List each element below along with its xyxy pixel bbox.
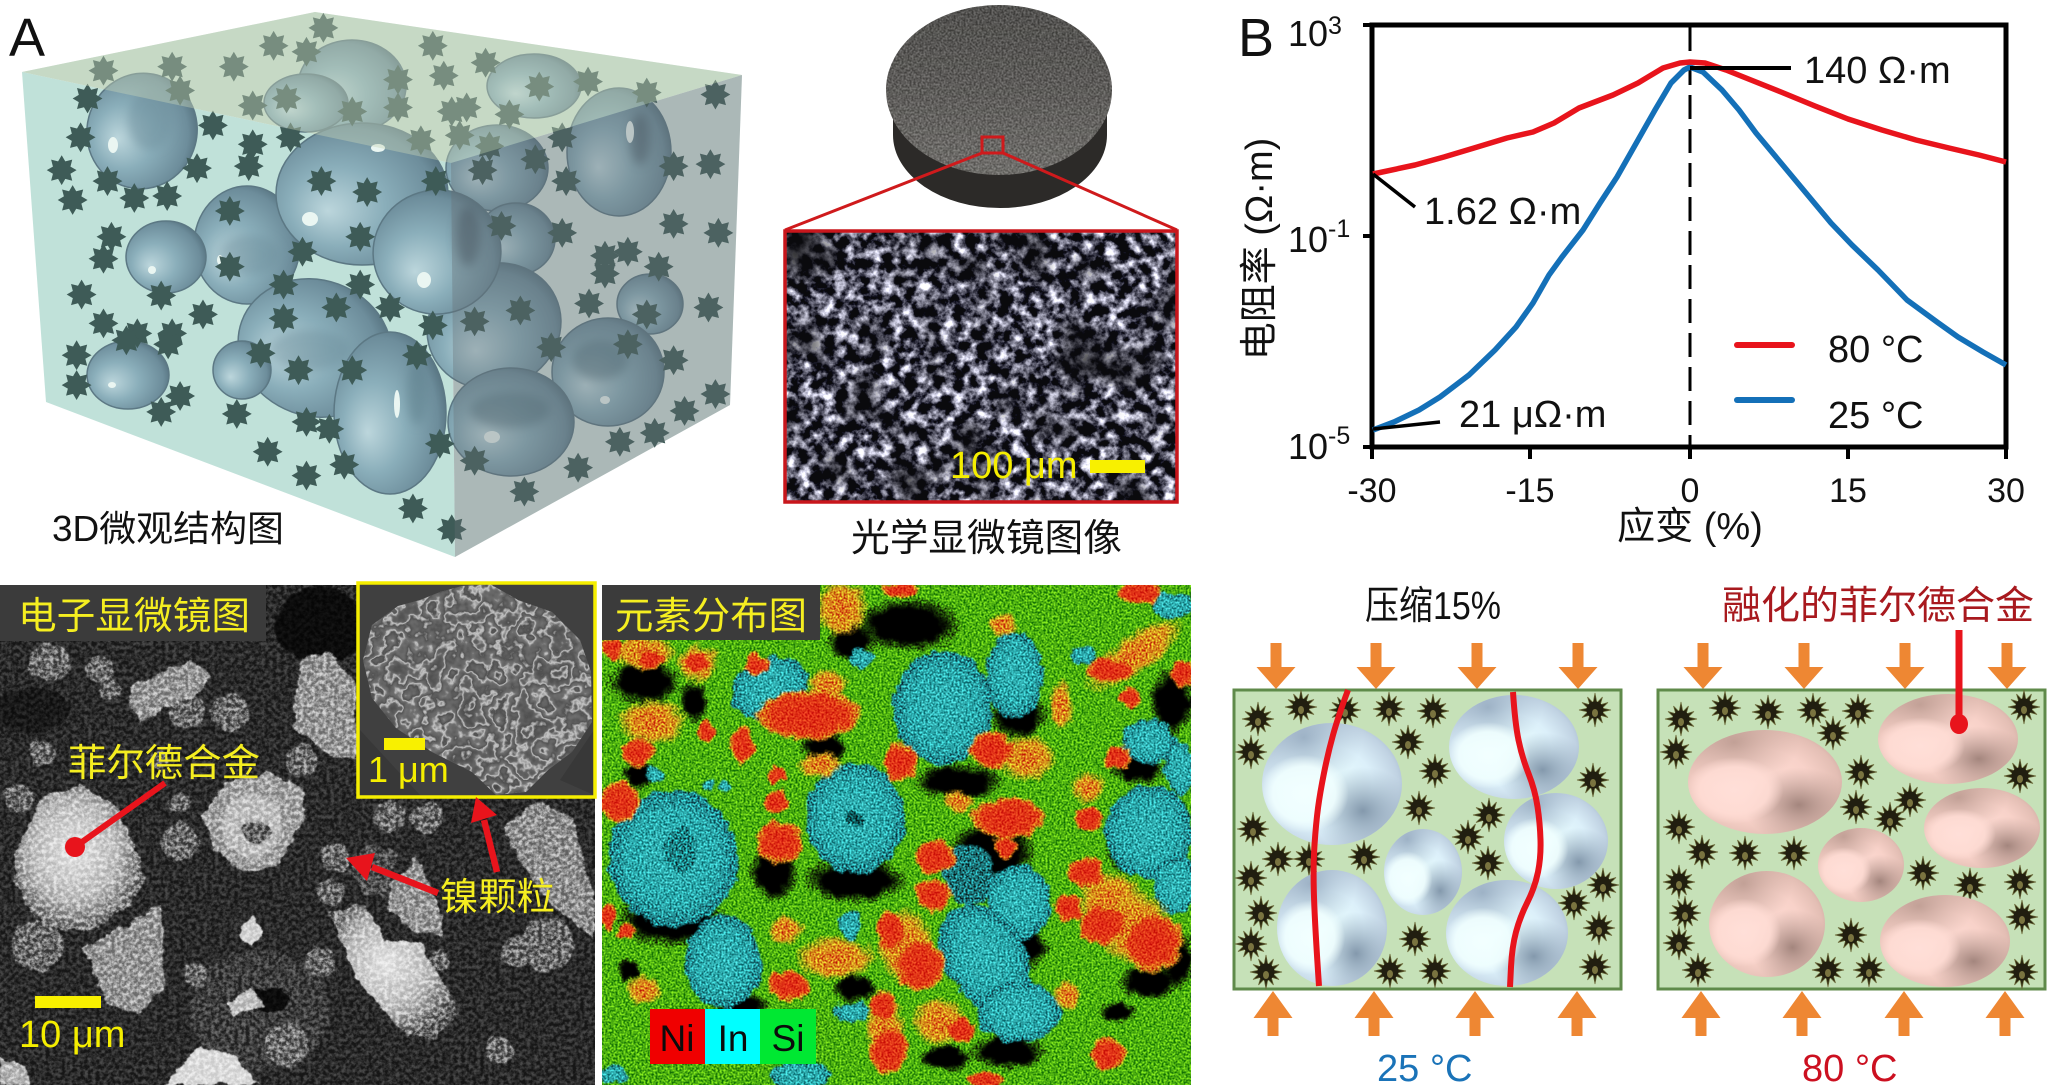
dark shadows <box>606 597 1196 1072</box>
element legend: Ni <box>660 1018 694 1059</box>
solid alloy spheres <box>1262 695 1608 986</box>
cube top face <box>22 12 742 163</box>
y tick labels: -1 <box>1328 215 1350 243</box>
element distribution map <box>598 578 1199 1086</box>
y tick labels: 10 <box>1288 426 1328 467</box>
matrix panel <box>1658 690 2045 989</box>
particles <box>0 587 593 1085</box>
map blobs <box>598 578 1199 1086</box>
element map label box: 元素分布图 <box>615 596 807 638</box>
micrograph border <box>785 231 1177 502</box>
x tick labels: -30 <box>1347 472 1397 510</box>
inset border <box>358 583 595 797</box>
callout line to molten alloy <box>1950 630 1968 734</box>
translucent top-face shading <box>22 12 742 163</box>
callout 140: 140 Ω·m <box>1804 50 1951 92</box>
schematic 80 C <box>1658 690 2045 989</box>
disc side <box>893 110 1107 208</box>
axes frame <box>1372 25 2006 447</box>
inset background <box>358 582 595 797</box>
panel label B: B <box>1238 8 1274 68</box>
annotation: nickel particles <box>346 797 555 919</box>
3D microstructure cube <box>22 12 742 557</box>
legend: 80 °C <box>1828 329 1923 371</box>
electron micrograph <box>0 585 595 1085</box>
heading: compress 15%: 压缩15% <box>1365 585 1501 628</box>
SEM label box <box>0 585 266 641</box>
curve 25 C <box>1373 67 2006 430</box>
cube left face <box>22 72 455 557</box>
element map label box <box>602 585 820 640</box>
annotation: Field's alloy: 菲尔德合金 <box>68 743 260 785</box>
inset scale text: 1 μm <box>368 749 449 790</box>
legend <box>1737 329 1923 437</box>
top arrows right panel <box>1684 643 2026 689</box>
y axis title: 电阻率 (Ω·m) <box>1239 138 1281 360</box>
panel label A: A <box>9 8 45 68</box>
disc top surface <box>886 5 1112 175</box>
y tick labels: 10 <box>1288 13 1328 54</box>
dark background <box>0 585 595 1085</box>
SEM label box: 电子显微镜图 <box>18 596 250 638</box>
scale bar <box>1090 460 1145 473</box>
caption: 3D microstructure: 3D微观结构图 <box>52 508 284 549</box>
curve 80 C <box>1373 62 2006 174</box>
SEM scale bar: 10 μm <box>19 1014 125 1056</box>
flower particle <box>358 582 595 797</box>
y tick labels: -5 <box>1328 422 1350 450</box>
x tick labels: -15 <box>1505 472 1555 510</box>
surface texture <box>0 585 595 1085</box>
y tick labels <box>1288 12 1350 467</box>
resistivity chart <box>1239 12 2025 548</box>
ticks <box>1363 25 2006 459</box>
translucent right-face shading <box>451 75 742 557</box>
alloy bubbles <box>74 40 683 494</box>
x axis title: 应变 (%) <box>1617 506 1763 548</box>
x tick labels: 0 <box>1681 472 1699 510</box>
caption: optical microscope: 光学显微镜图像 <box>851 518 1122 560</box>
optical micrograph <box>785 231 1177 502</box>
teal alloy blobs <box>598 592 1199 1086</box>
micrograph texture <box>785 231 1177 502</box>
x tick labels <box>1347 472 2025 510</box>
element legend: Si <box>772 1018 804 1059</box>
x tick labels: 30 <box>1987 472 2025 510</box>
callout 1.62: 1.62 Ω·m <box>1424 191 1581 233</box>
matrix panel <box>1234 690 1621 989</box>
callout 21 <box>1373 394 1606 436</box>
top arrows left panel <box>1256 643 1598 689</box>
cube right face <box>451 75 742 557</box>
bottom arrows left panel <box>1254 991 1596 1036</box>
molten alloy spheres <box>1688 694 2040 987</box>
bottom arrows right panel <box>1682 991 2024 1036</box>
green matrix <box>602 585 1191 1085</box>
nickel red blobs <box>598 581 1194 1086</box>
nickel stars in cube <box>47 13 733 544</box>
element legend: In <box>718 1018 748 1059</box>
y tick labels: 3 <box>1328 12 1342 40</box>
callout 1.62 <box>1373 174 1581 233</box>
bubble highlights <box>108 121 634 443</box>
scale text: 100 μm <box>950 445 1078 487</box>
SEM inset <box>358 582 595 797</box>
bubble shading <box>128 90 650 428</box>
speckle noise <box>602 585 1191 1085</box>
zero strain dashed line <box>1688 27 1692 445</box>
heading: molten alloy: 融化的菲尔德合金 <box>1722 585 2034 628</box>
nickel stars <box>1660 690 2040 989</box>
y tick labels: 10 <box>1288 219 1328 260</box>
annotation: nickel particles: 镍颗粒 <box>440 877 555 919</box>
inset scale bar <box>384 738 425 750</box>
disc texture <box>886 4 1112 176</box>
legend: 25 °C <box>1828 395 1923 437</box>
broken conductive paths <box>1314 690 1541 987</box>
zoom indicator lines <box>785 137 1177 230</box>
nickel stars <box>1235 690 1619 989</box>
element legend <box>650 1009 816 1064</box>
sample disc photo <box>886 4 1112 208</box>
x tick labels: 15 <box>1829 472 1867 510</box>
schematic 25 C <box>1234 690 1621 989</box>
annotation: Field's alloy <box>65 743 260 857</box>
callout 21: 21 μΩ·m <box>1459 394 1606 436</box>
orange halo blobs <box>611 578 1195 1065</box>
